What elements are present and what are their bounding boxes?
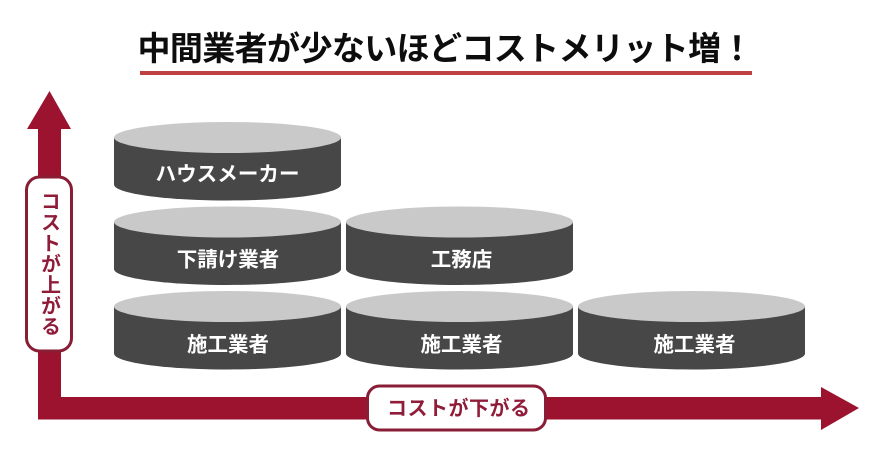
label: cost falls: コストが下がる bbox=[387, 396, 530, 420]
arrow: vertical axis, cost rises bbox=[27, 91, 71, 397]
label: cost rises bbox=[26, 177, 72, 351]
label: cost falls bbox=[368, 386, 546, 430]
disc: 施工業者, middle: 施工業者 bbox=[420, 334, 502, 356]
disc: 工務店 bbox=[346, 206, 573, 285]
title: 中間業者が少ないほどコストメリット増！ bbox=[138, 30, 754, 67]
disc: ハウスメーカー bbox=[114, 122, 341, 200]
label: cost rises: コストが上がる bbox=[38, 191, 60, 336]
disc: 工務店: 工務店 bbox=[431, 248, 492, 272]
arrow: horizontal axis, cost falls bbox=[38, 387, 859, 430]
disc: 施工業者, right: 施工業者 bbox=[654, 334, 736, 356]
disc: 施工業者, left bbox=[114, 291, 341, 370]
disc: 施工業者, middle bbox=[346, 291, 573, 370]
disc: 施工業者, right bbox=[578, 291, 805, 370]
disc: 施工業者, left: 施工業者 bbox=[187, 334, 269, 356]
title underline bbox=[140, 71, 752, 75]
disc: 下請け業者 bbox=[114, 206, 341, 285]
disc: ハウスメーカー: ハウスメーカー bbox=[156, 163, 300, 186]
disc: 下請け業者: 下請け業者 bbox=[177, 248, 279, 272]
